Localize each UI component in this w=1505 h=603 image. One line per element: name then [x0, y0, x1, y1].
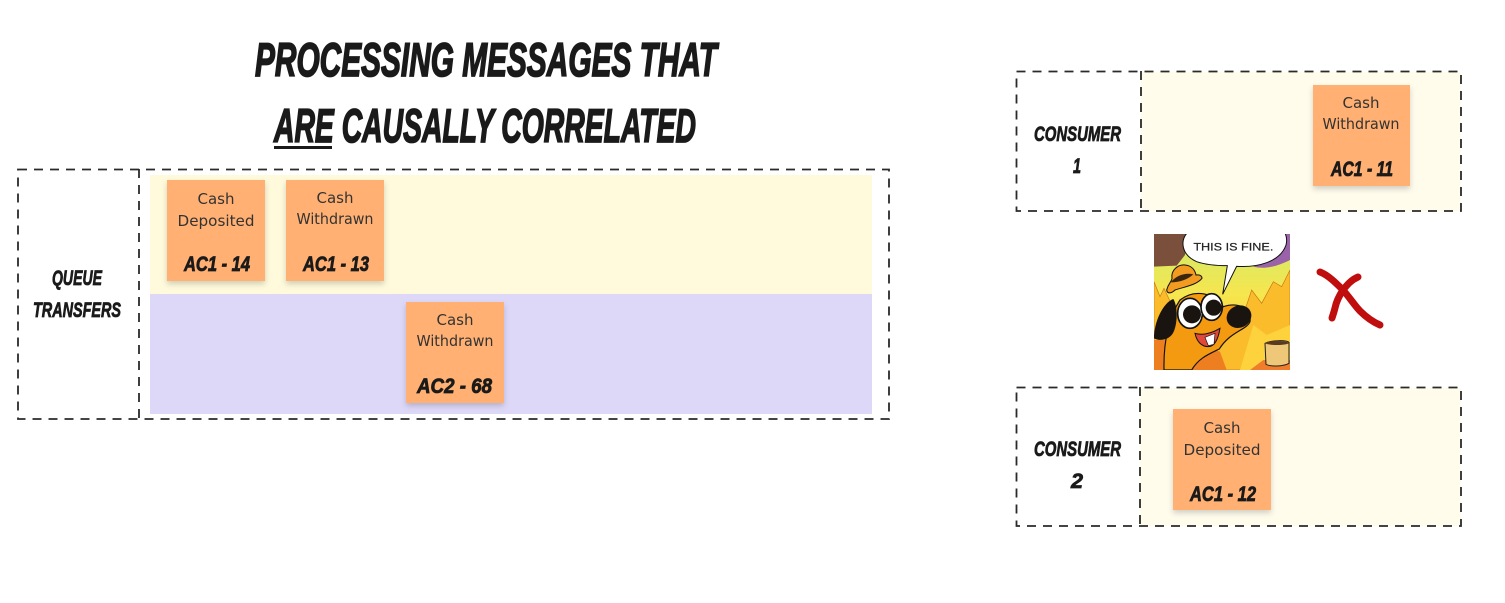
coffee mug — [1265, 341, 1289, 366]
sticky note: AC1 - 13 — [286, 180, 384, 281]
sticky note: AC2 - 68: Withdrawn — [416, 332, 494, 350]
consumer 2 label — [1034, 438, 1122, 493]
sticky note: AC1 - 11: AC1 - 11 — [1330, 158, 1393, 181]
icon: red cross — [1320, 272, 1380, 325]
sticky note: AC2 - 68 — [406, 302, 504, 403]
sticky note: AC1 - 12 — [1173, 409, 1271, 510]
sticky note: AC1 - 14 — [167, 180, 265, 281]
panel: consumer 1 — [1016, 71, 1461, 211]
icon: this is fine meme — [1154, 230, 1290, 370]
sticky note: AC1 - 11 — [1313, 85, 1410, 186]
sticky note: AC1 - 13: Cash — [316, 189, 354, 207]
sticky note: AC1 - 12: Deposited — [1184, 441, 1260, 459]
sticky note: AC1 - 11: Withdrawn — [1322, 115, 1400, 133]
speech bubble — [1183, 230, 1287, 294]
queue label: QUEUE — [52, 267, 103, 290]
sticky note: AC2 - 68: Cash — [436, 311, 474, 329]
purple partition — [150, 294, 872, 414]
consumer 1 label — [1034, 123, 1122, 178]
title: ARE CAUSALLY CORRELATED — [273, 99, 696, 152]
queue label — [33, 267, 121, 322]
title: PROCESSING MESSAGES THAT — [255, 33, 720, 86]
sticky note: AC1 - 13: Withdrawn — [296, 210, 374, 228]
yellow partition — [150, 175, 872, 294]
sticky note: AC1 - 13: AC1 - 13 — [302, 253, 369, 276]
sticky note: AC1 - 14: Deposited — [178, 212, 254, 230]
sticky note: AC1 - 11: Cash — [1342, 94, 1380, 112]
consumer 1 label: CONSUMER — [1034, 123, 1122, 146]
consumer 2 label: 2 — [1070, 470, 1083, 493]
sticky note: AC1 - 12: Cash — [1204, 419, 1240, 437]
icon: this is fine meme: THIS IS FINE. — [1193, 241, 1273, 253]
queue label: TRANSFERS — [33, 299, 121, 322]
sticky note: AC2 - 68: AC2 - 68 — [416, 375, 492, 398]
consumer 1 label: 1 — [1073, 155, 1081, 178]
sticky note: AC1 - 14: AC1 - 14 — [183, 253, 250, 276]
title — [255, 33, 720, 152]
consumer 2 label: CONSUMER — [1034, 438, 1122, 461]
panel: consumer 2 — [1016, 387, 1461, 526]
flames — [1154, 270, 1290, 370]
dog — [1164, 293, 1250, 370]
sticky note: AC1 - 14: Cash — [198, 190, 234, 208]
sticky note: AC1 - 12: AC1 - 12 — [1189, 483, 1256, 506]
panel: queue transfers — [18, 169, 889, 419]
